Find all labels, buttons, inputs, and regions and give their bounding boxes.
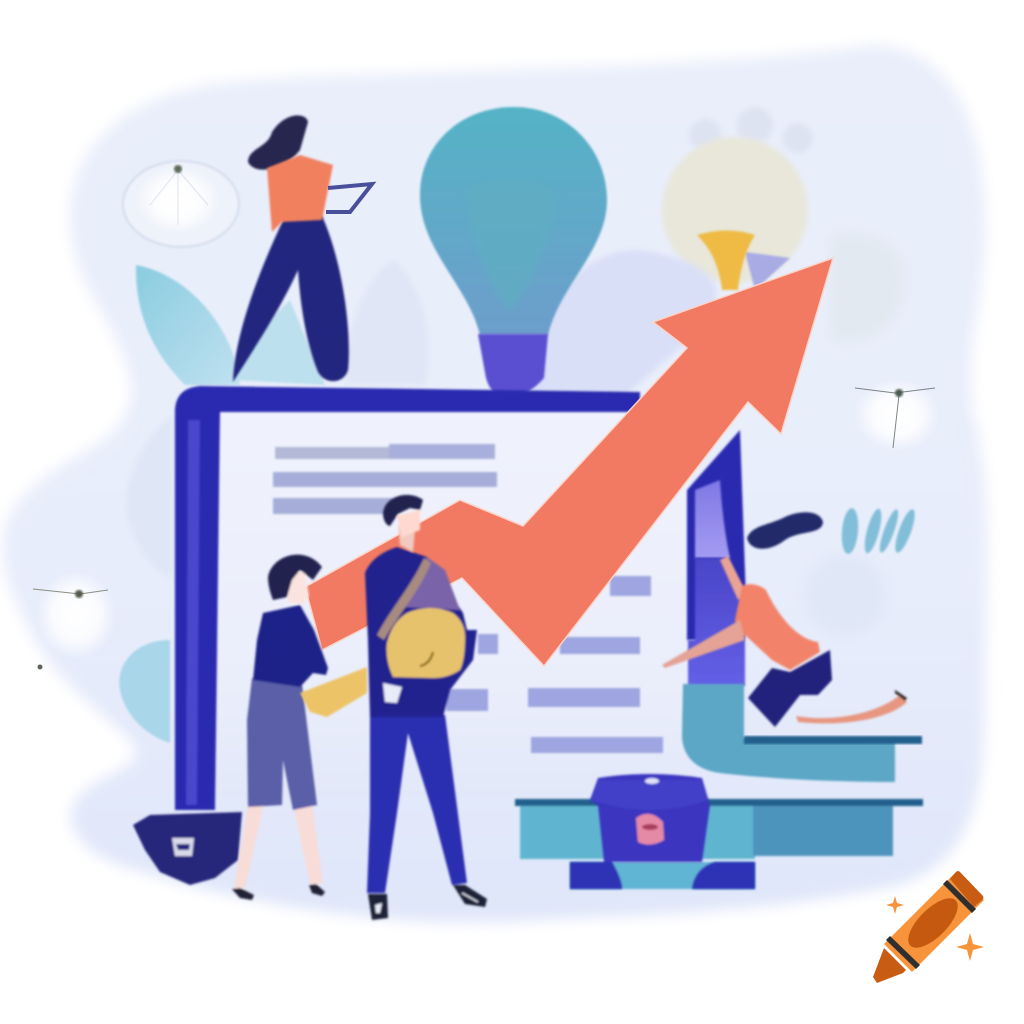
bubble: pale circle right of column [803, 553, 887, 637]
lower orange strip [796, 695, 907, 723]
text lines top [273, 444, 497, 514]
torso [365, 547, 477, 717]
pale circle behind frame [127, 415, 172, 578]
top [253, 605, 328, 687]
sparkle: right [855, 379, 939, 451]
woman with shorts [232, 555, 328, 900]
neck and head [398, 525, 415, 552]
bubble: upper right glow [830, 233, 906, 343]
small teal leaf [119, 640, 170, 743]
bulb base [478, 334, 548, 397]
feet of backpack [570, 862, 622, 889]
man with bag [365, 495, 487, 920]
decorative leaf: pale centre [345, 260, 429, 385]
oval [900, 890, 966, 956]
white bottom fade [0, 950, 1024, 1024]
growth arrow [305, 258, 833, 666]
bag purple top [403, 557, 460, 610]
woman standing on screen [233, 115, 372, 382]
sparkle globe: upper left [123, 161, 239, 247]
kicking figure foot and shoe [662, 556, 907, 727]
dark shape right of column [747, 512, 823, 549]
body [884, 872, 984, 972]
laptop frame [175, 386, 690, 810]
screen [216, 412, 690, 796]
stars [886, 896, 904, 914]
backpack on platform [570, 774, 755, 889]
text lines right [446, 576, 663, 753]
main bulb [420, 107, 607, 397]
tip [873, 948, 906, 983]
pale bulb with yellow base [662, 107, 813, 290]
shoes [368, 894, 388, 920]
cap [950, 871, 984, 907]
shorts [247, 678, 317, 810]
dark glove on floor [133, 812, 242, 885]
torso [267, 155, 333, 232]
yellow strip [300, 667, 367, 717]
crayon logo [873, 871, 984, 983]
legs [233, 216, 349, 382]
second teal leaf [232, 300, 325, 385]
right column of frame [682, 430, 922, 782]
teal base elbow [682, 684, 895, 782]
bag strap [377, 558, 431, 640]
lower teal platform [515, 799, 923, 889]
sparkle: left [33, 571, 116, 670]
hair [268, 555, 322, 600]
soft violet shape behind main bulb [520, 250, 716, 400]
legs [234, 804, 264, 888]
striped ovals [840, 507, 919, 555]
shoes [232, 888, 254, 900]
large teal leaf [136, 265, 240, 385]
trousers [367, 715, 467, 893]
bag yellow [387, 608, 465, 678]
bands [886, 936, 920, 969]
hair [248, 115, 308, 170]
face [287, 572, 309, 604]
book [326, 184, 372, 212]
